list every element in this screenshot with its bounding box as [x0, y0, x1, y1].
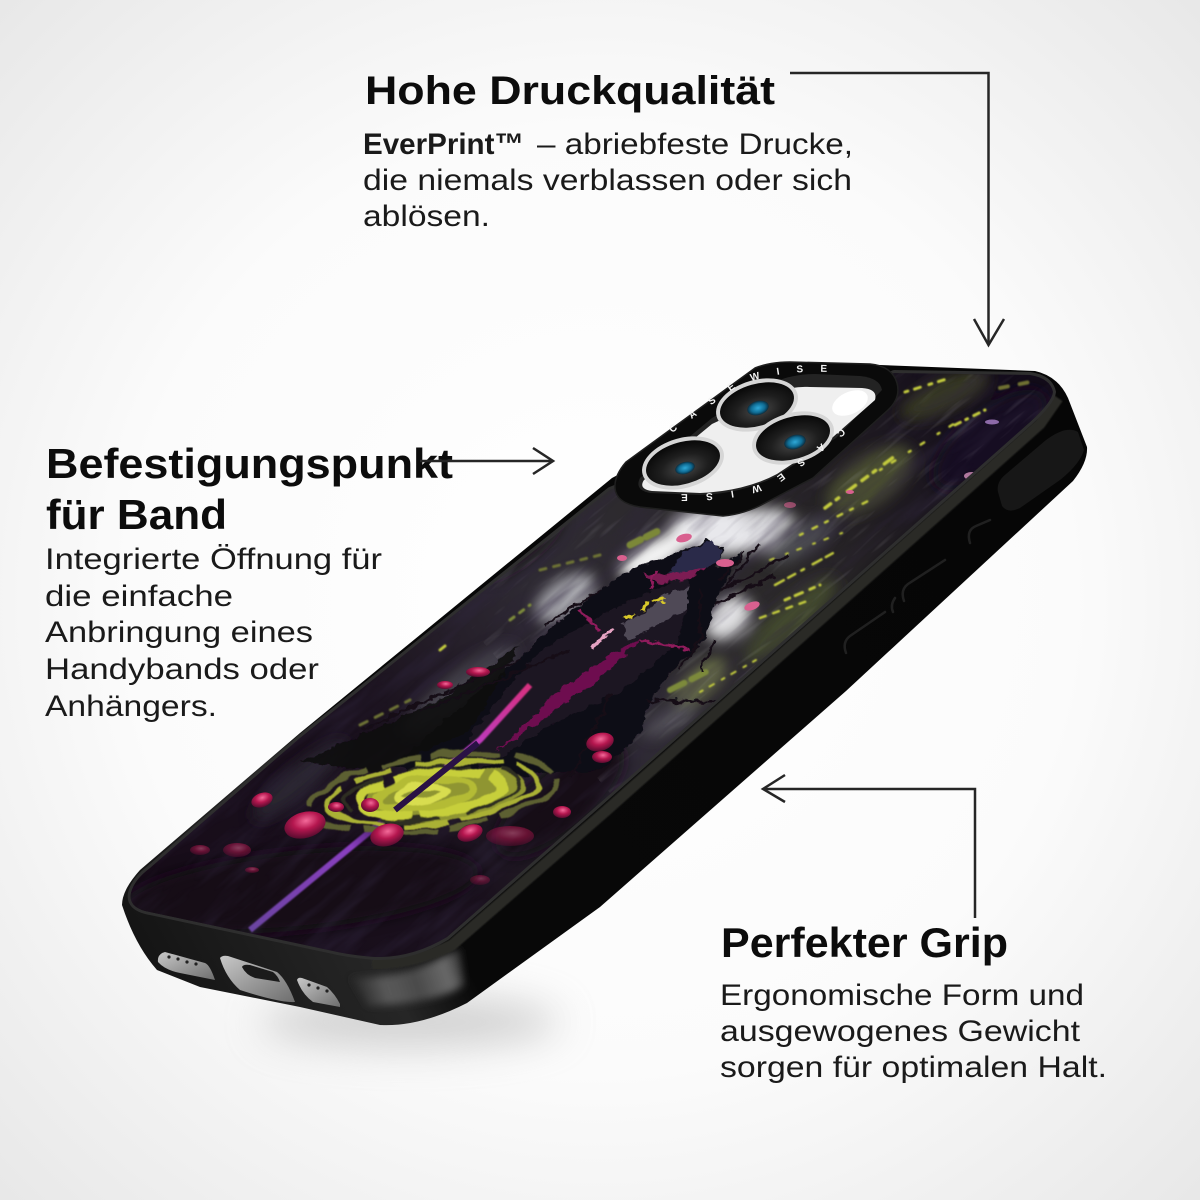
case body	[122, 363, 1087, 1025]
heading: Perfekter Grip	[721, 919, 1008, 966]
camera opening	[642, 387, 875, 493]
description: Anbringung eines	[45, 616, 313, 649]
heading: Befestigungspunkt	[46, 440, 453, 487]
description: ausgewogenes Gewicht	[720, 1015, 1081, 1048]
lens right	[746, 402, 840, 474]
ring inner shading	[638, 374, 882, 495]
misty sky and forest masses	[253, 374, 1028, 928]
lens left	[636, 427, 730, 499]
ring lettering bottom: C A S E W I S E	[681, 430, 845, 501]
dark cloaked figure	[300, 540, 790, 782]
printed artwork	[130, 373, 1053, 957]
camera ring	[614, 361, 898, 517]
heading: Hohe Druckqualität	[365, 69, 775, 113]
charging port	[220, 956, 295, 1002]
arrow: grip	[763, 775, 975, 918]
flash and glass highlight	[828, 385, 872, 421]
right speaker	[297, 978, 340, 1007]
description	[720, 979, 1107, 1084]
right rim band	[372, 398, 1058, 963]
description	[45, 543, 382, 723]
foliage specks	[360, 378, 1030, 725]
left speaker	[158, 952, 215, 980]
callout: print quality	[363, 69, 853, 233]
description: Handybands oder	[45, 653, 319, 686]
ring lettering top: C A S E W I S E	[670, 364, 827, 432]
arrow: print quality	[790, 73, 1004, 345]
painterly dark streaks	[131, 374, 989, 957]
description: die niemals verblassen oder sich	[363, 164, 852, 197]
description: – abriebfeste Drucke,	[537, 128, 853, 161]
description: Integrierte Öffnung für	[45, 543, 382, 576]
lens top	[710, 369, 804, 441]
speaker holes	[167, 955, 329, 993]
sword over swirl	[395, 743, 478, 810]
charging slot	[242, 965, 280, 982]
description: EverPrint™	[363, 128, 524, 161]
glowing sword	[250, 685, 530, 930]
screen rim	[131, 373, 1053, 957]
bottom ports	[158, 952, 340, 1007]
painterly light streaks	[484, 374, 1041, 792]
side buttons	[845, 520, 990, 653]
description: Ergonomische Form und	[720, 979, 1084, 1012]
description: sorgen für optimalen Halt.	[720, 1051, 1107, 1084]
yellow swirl	[306, 748, 560, 836]
description: die einfache	[45, 580, 233, 613]
red orbs	[190, 667, 616, 885]
description	[363, 128, 853, 233]
arrow: strap attachment	[420, 448, 553, 474]
pink petals	[617, 420, 999, 612]
description: Anhängers.	[45, 690, 217, 723]
heading: für Band	[46, 491, 227, 538]
callout: strap attachment	[45, 440, 453, 723]
callout: grip	[720, 919, 1107, 1084]
phone shadow	[260, 996, 560, 1048]
bottom corner highlight	[350, 948, 464, 1006]
strap attachment	[998, 430, 1084, 511]
phone case	[122, 361, 1088, 1026]
description: ablösen.	[363, 200, 490, 233]
heading	[46, 440, 453, 538]
